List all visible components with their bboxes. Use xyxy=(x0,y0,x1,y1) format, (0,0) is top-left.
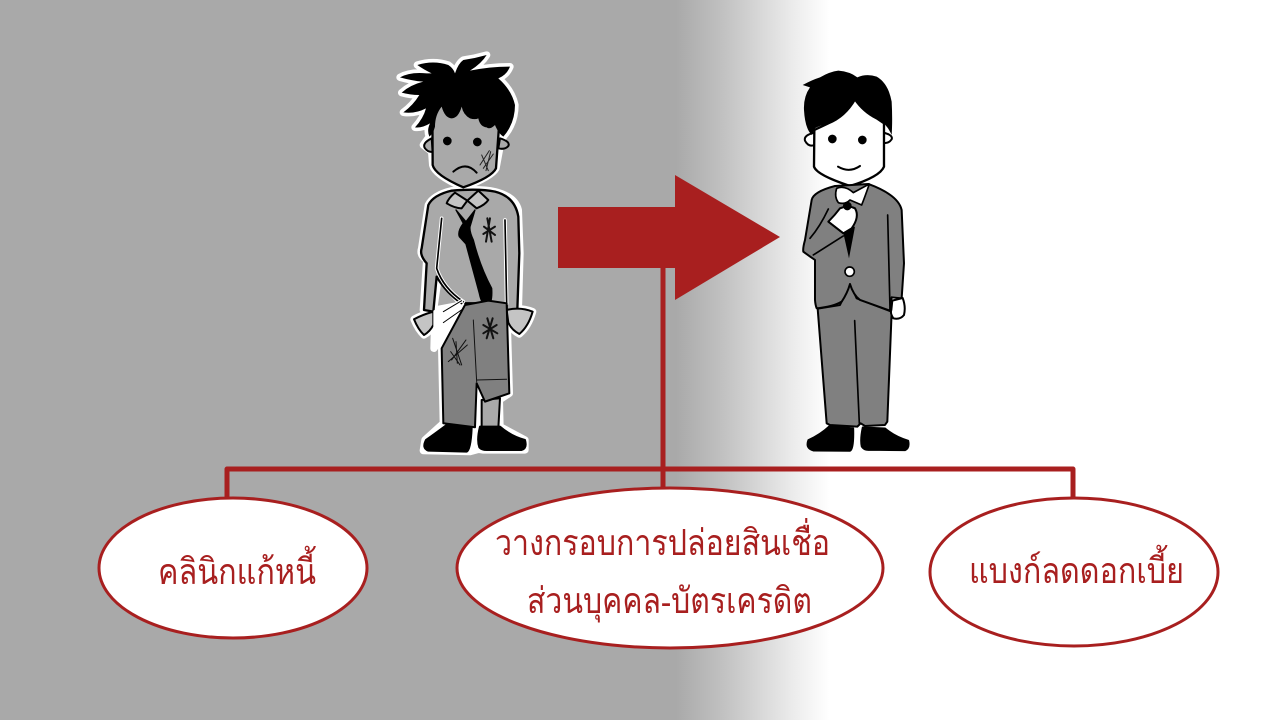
arrow xyxy=(558,175,780,300)
pants patches xyxy=(483,318,497,338)
eyes xyxy=(443,137,482,146)
tie knot xyxy=(843,202,852,210)
necktie xyxy=(456,210,492,307)
necktie xyxy=(843,227,855,258)
smile xyxy=(838,166,860,170)
label: line two: ส่วนบุคคล-บัตรเครดิต xyxy=(527,581,812,623)
jacket button xyxy=(845,267,854,276)
ellipse: banks cut interest xyxy=(930,498,1218,646)
figure: poor man in torn clothes xyxy=(400,55,533,452)
shoes xyxy=(424,425,526,452)
label: banks cut interest: แบงก์ลดดอกเบี้ย xyxy=(969,544,1184,591)
connector lines xyxy=(227,268,1073,497)
shirt and bow xyxy=(836,184,869,205)
eyes xyxy=(828,135,867,144)
pants xyxy=(442,301,509,427)
ellipse: personal loan and credit card limit xyxy=(457,488,883,648)
right hand xyxy=(891,298,905,319)
trousers xyxy=(818,284,892,427)
bare leg xyxy=(482,398,500,428)
collar xyxy=(447,191,488,208)
figure: well-dressed man in suit xyxy=(803,71,909,451)
ears xyxy=(424,138,509,152)
label: line one: วางกรอบการปล่อยสินเชื่อ xyxy=(495,518,830,563)
sleeve and torso lines xyxy=(437,218,507,303)
ears xyxy=(805,133,892,146)
scratches on cheek xyxy=(480,151,493,171)
raised hand xyxy=(828,207,857,233)
shirt xyxy=(421,190,519,312)
jacket xyxy=(803,184,904,311)
right hand xyxy=(507,309,533,334)
trouser crease xyxy=(855,321,859,423)
label: debt clinic: คลินิกแก้หนี้ xyxy=(158,545,317,592)
arm lines xyxy=(810,209,890,308)
left hand xyxy=(414,312,433,335)
sad mouth xyxy=(453,166,477,173)
ellipse: debt clinic xyxy=(99,498,367,638)
shoes xyxy=(807,426,909,451)
hair xyxy=(400,55,515,137)
hair xyxy=(803,71,892,135)
shirt patch xyxy=(483,218,495,242)
white halo around poor man xyxy=(400,55,533,452)
face xyxy=(432,103,501,187)
face xyxy=(814,99,884,186)
torn pocket xyxy=(435,301,463,348)
